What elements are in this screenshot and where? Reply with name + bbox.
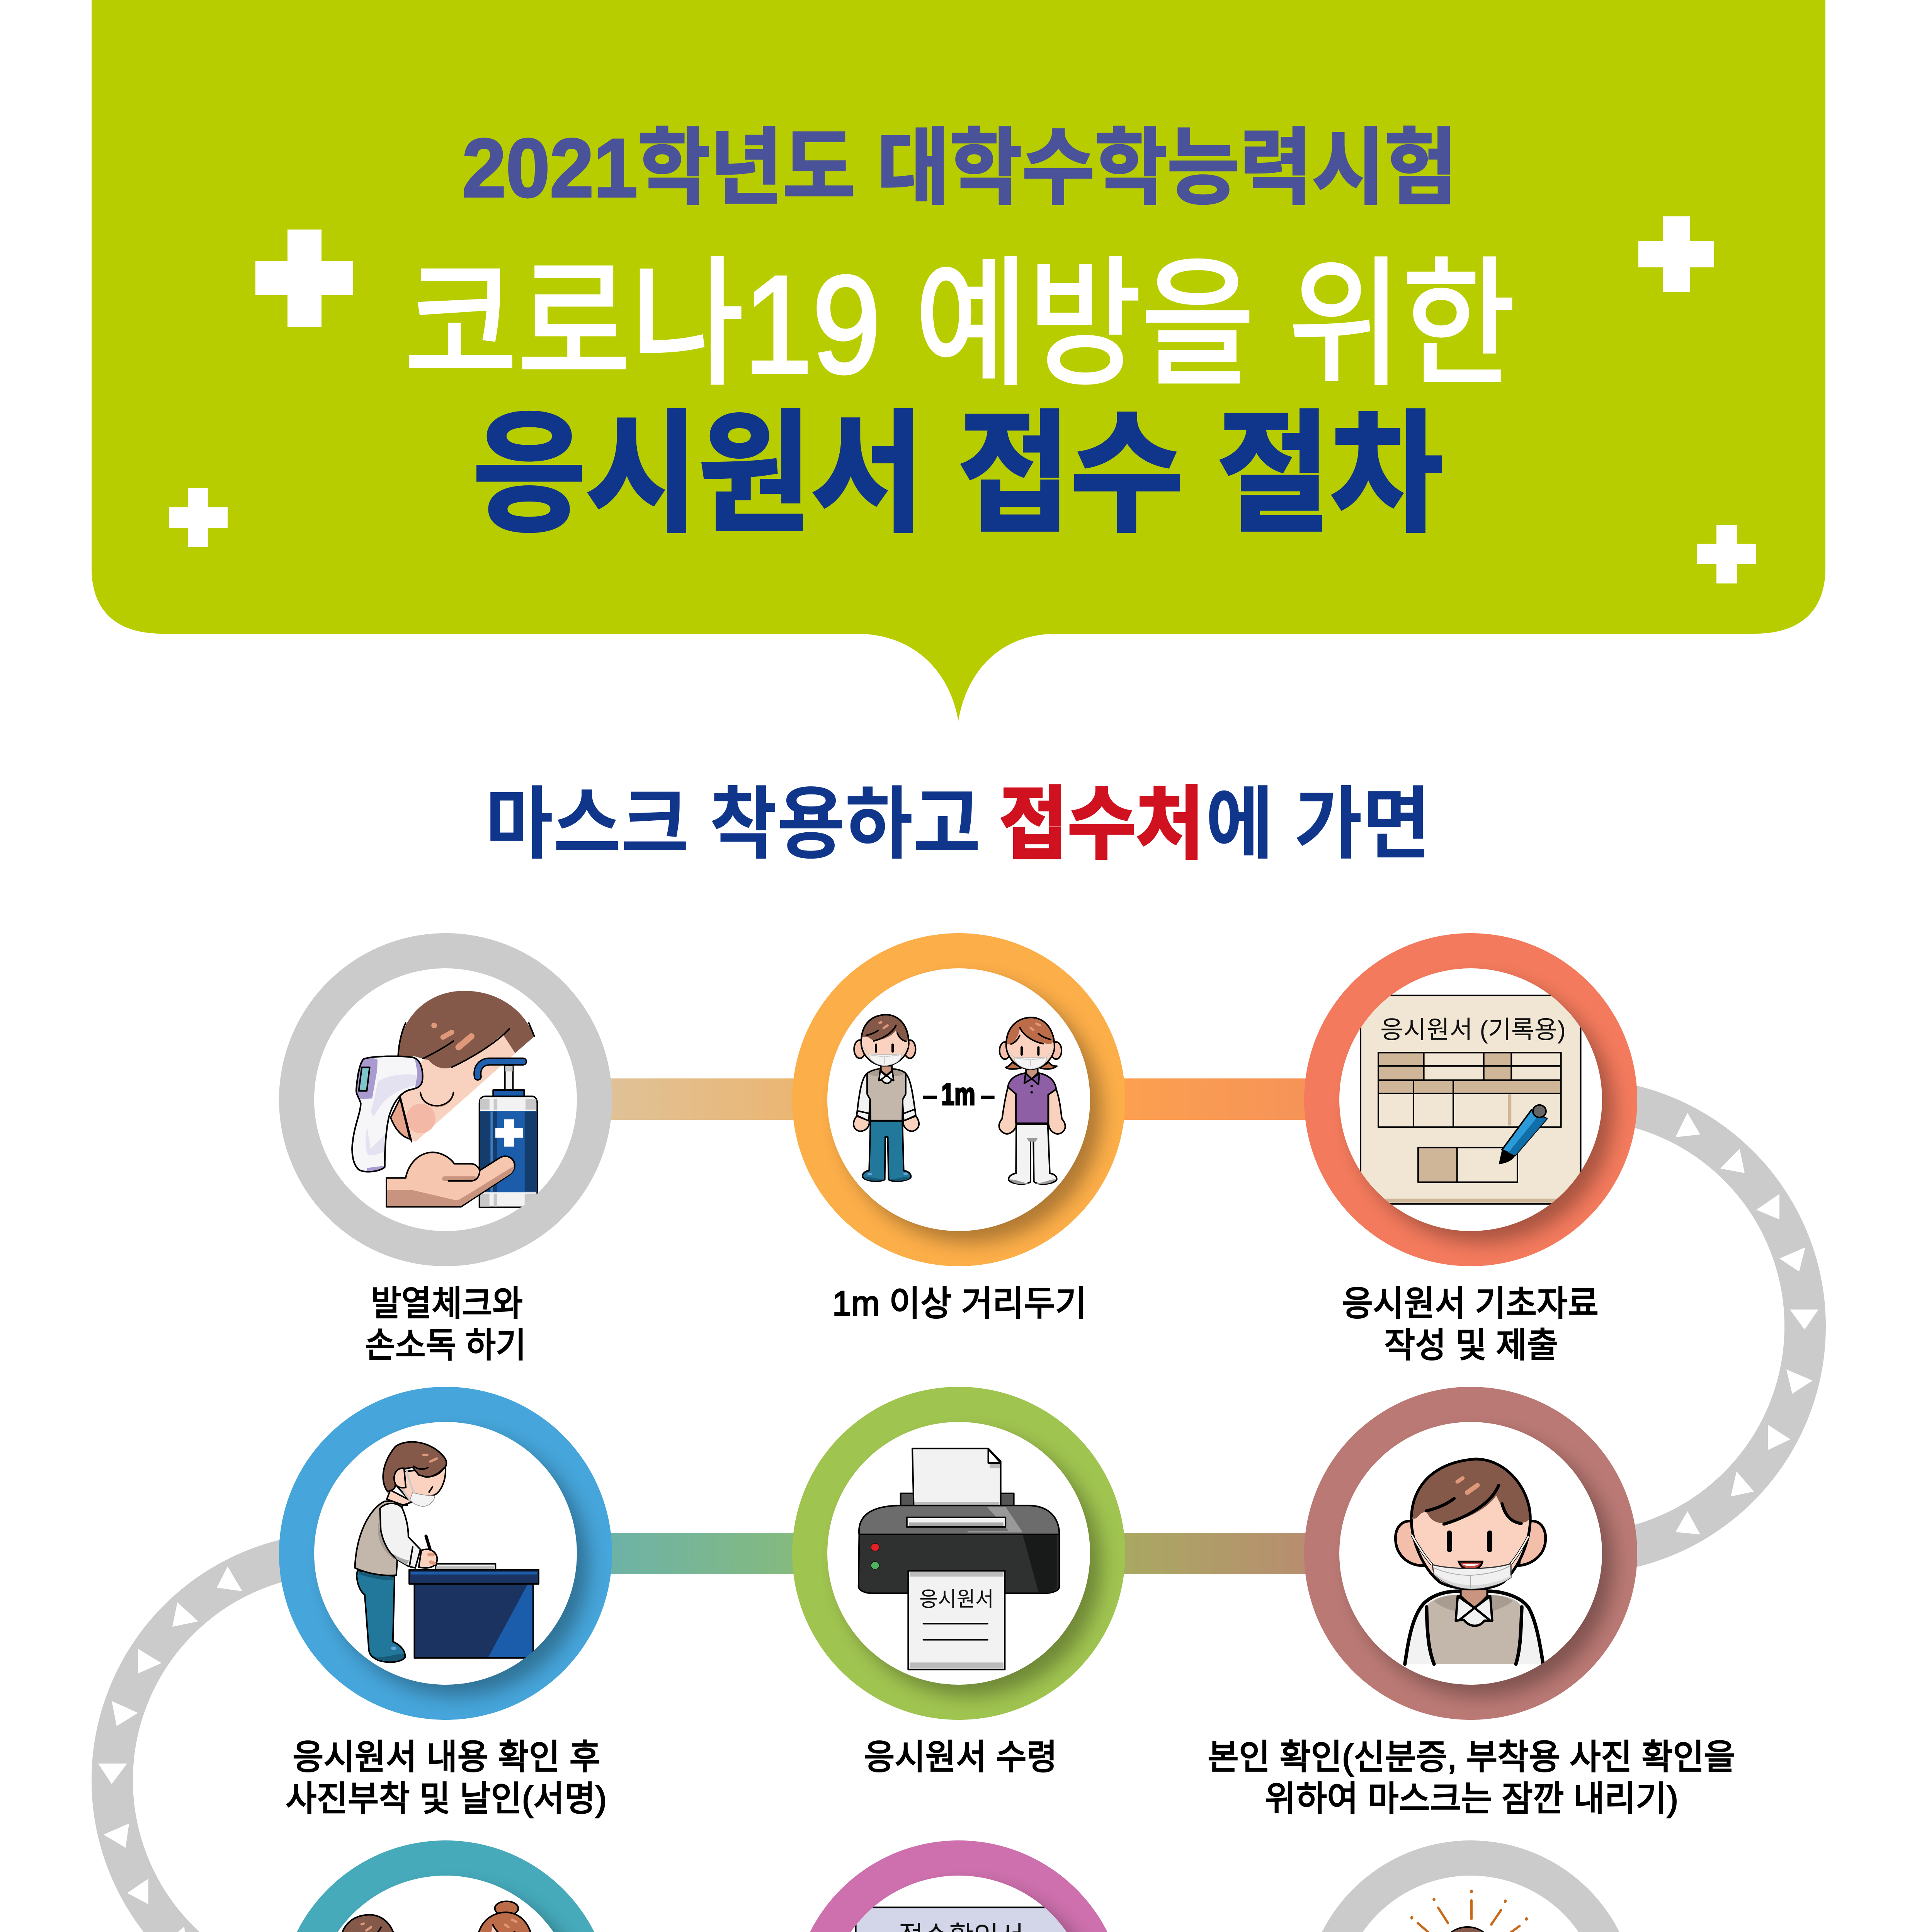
label: [1342, 1284, 1599, 1365]
step 6: identity check: [1208, 1387, 1735, 1818]
title line 3: 응시원서 접수 절차: [473, 401, 1443, 548]
arrow arc: right: [1578, 1099, 1818, 1553]
icon: thermometer, face and sanitizer: [352, 991, 537, 1208]
title line 1: 2021학년도 대학수학능력시험: [462, 121, 1457, 214]
plus icon: [255, 230, 353, 327]
step 3: write basic data: [1304, 933, 1637, 1365]
plus icon: [1697, 525, 1756, 583]
icon: person signing at desk: [355, 1442, 539, 1662]
step 4: review and sign: [279, 1387, 612, 1818]
label: 응시원서 수령: [864, 1738, 1057, 1777]
plus icon: [169, 488, 228, 547]
icon: two people 1m apart: [854, 1015, 1065, 1184]
icon: printer: [859, 1449, 1059, 1670]
icon: two people 1m apart: 1m: [941, 1077, 975, 1111]
icon: application form: [1361, 995, 1581, 1204]
label: [365, 1284, 526, 1365]
step 8: confirm receipt form: [792, 1840, 1135, 1932]
plus icon: [1638, 216, 1714, 292]
subheading: [485, 780, 1431, 869]
label: [286, 1738, 607, 1818]
label: 손소독 하기: [365, 1326, 526, 1365]
label: 사진부착 및 날인(서명): [286, 1780, 607, 1818]
label: 1m 이상 거리두기: [832, 1284, 1087, 1323]
icon: submitting at desk: [331, 1901, 562, 1932]
subheading: 마스크 착용하고: [485, 780, 981, 869]
connector bars: [607, 1078, 1310, 1932]
label: 응시원서 내용 확인 후: [293, 1738, 600, 1777]
icon: person holding receipt: [1410, 1889, 1537, 1932]
step 2: keep 1m distance: [792, 933, 1125, 1323]
icon: receipt confirmation form: [856, 1907, 1071, 1932]
arrow arc: left: [98, 1553, 339, 1932]
icon: printer: 응시원서: [919, 1588, 994, 1611]
title line 2: 코로나19 예방을 위한: [404, 247, 1515, 402]
step 5: receive application form: [792, 1387, 1125, 1777]
label: 위하여 마스크는 잠깐 내리기): [1265, 1780, 1678, 1818]
icon: face with mask lowered: [1395, 1459, 1546, 1664]
icon: application form: 응시원서 (기록용): [1380, 1016, 1566, 1044]
step 7: submit and pay fee: [210, 1840, 682, 1932]
label: 작성 및 제출: [1384, 1326, 1558, 1365]
label: 응시원서 기초자료: [1342, 1284, 1599, 1323]
label: [1208, 1738, 1735, 1818]
subheading: 접수처: [999, 780, 1204, 869]
step 9: receive receipt: [1304, 1840, 1637, 1932]
label: 본인 확인(신분증, 부착용 사진 확인을: [1208, 1738, 1735, 1777]
subheading: 에 가면: [1206, 780, 1431, 869]
label: 발열체크와: [371, 1284, 523, 1323]
step 1: fever check and hand sanitizer: [279, 933, 612, 1365]
header banner: [92, 0, 1825, 721]
